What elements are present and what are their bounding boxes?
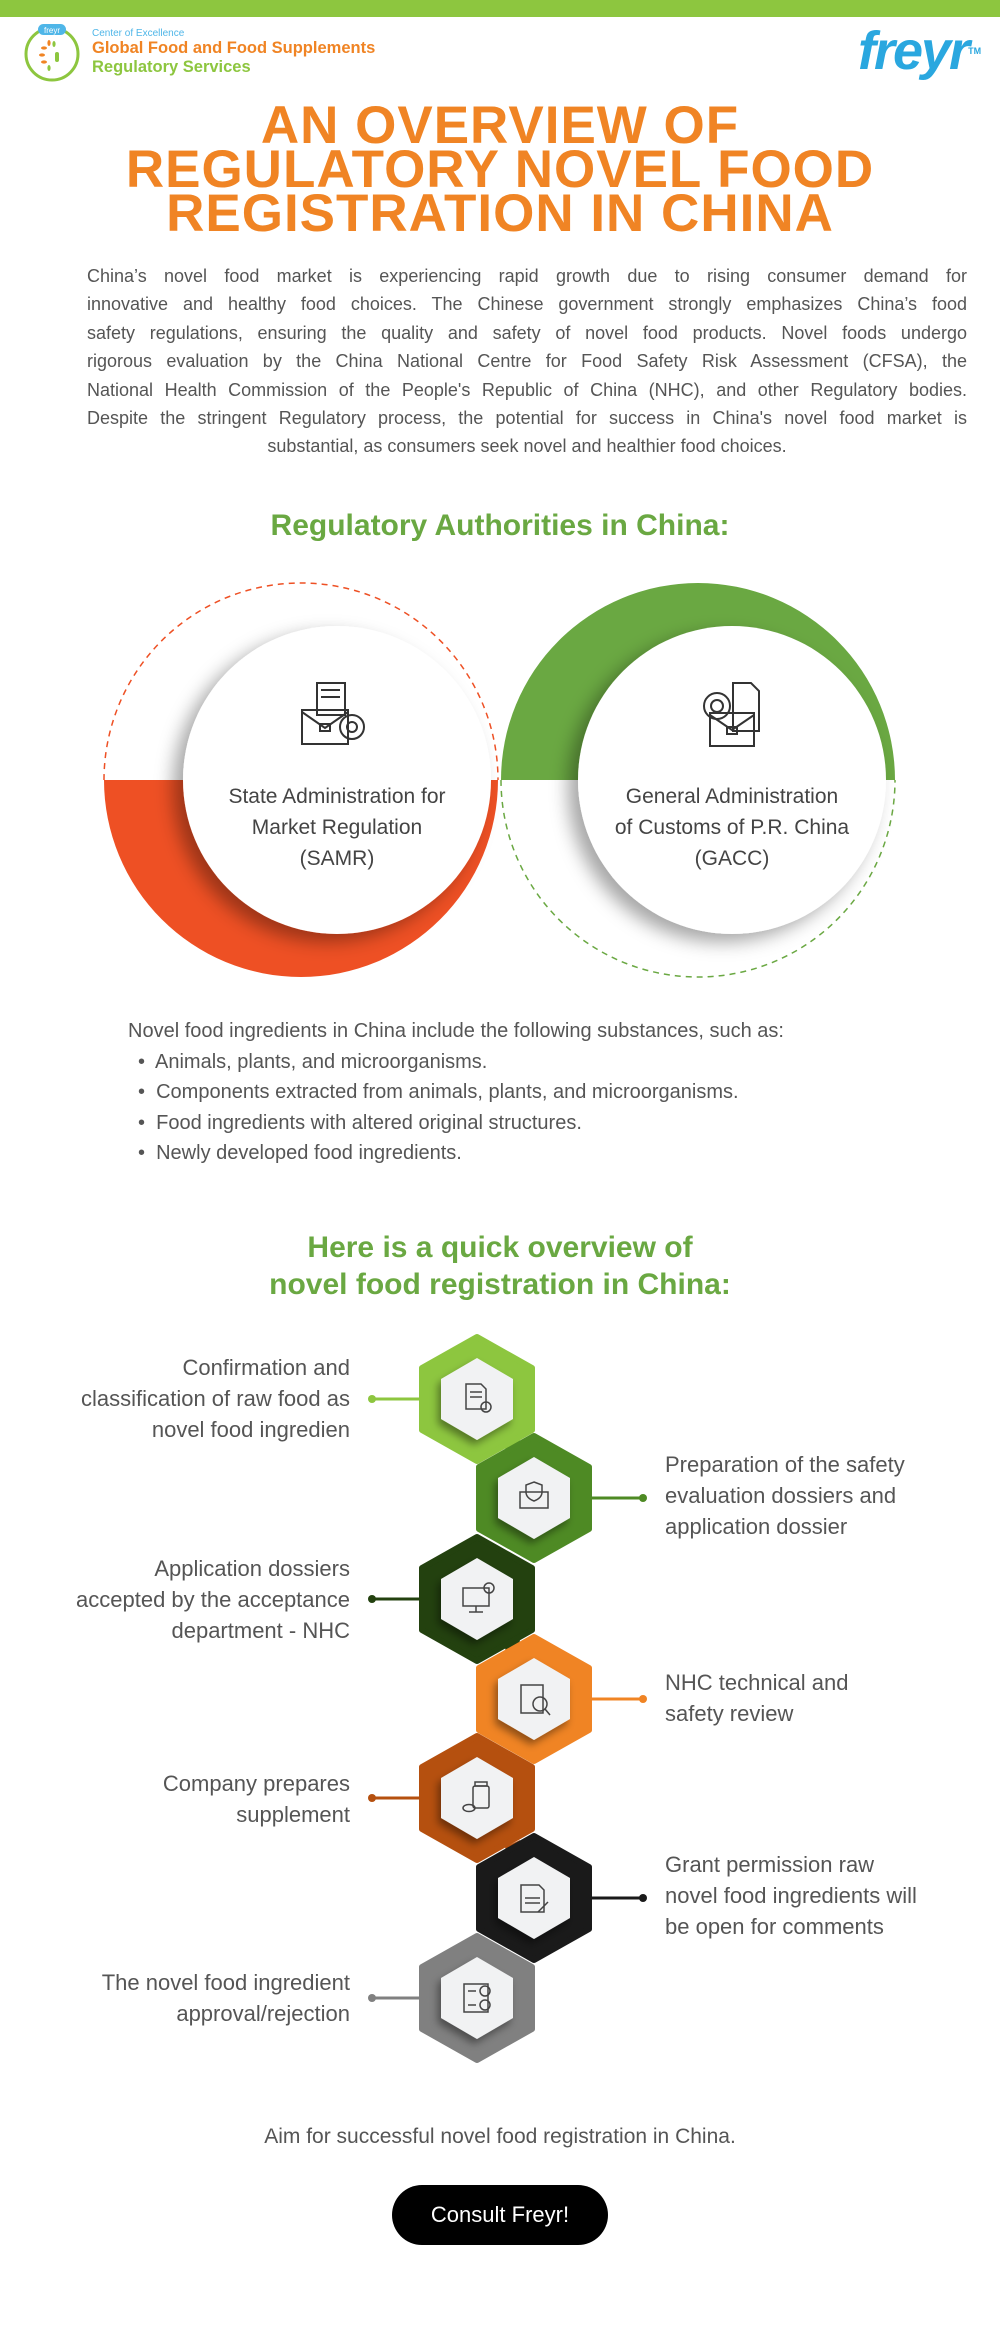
novel food ingredients list: • Components extracted from animals, plants, and microorganisms. <box>138 1081 739 1103</box>
step 1 text: Confirmation and <box>182 1355 350 1380</box>
step 3 <box>368 1537 532 1672</box>
logo: center of excellence: Global Food and Food Supplements <box>92 39 375 57</box>
panel: SAMR: State Administration for <box>228 785 446 808</box>
step 1 text: classification of raw food as <box>81 1386 350 1411</box>
step 6 text: novel food ingredients will <box>665 1883 917 1908</box>
logo: center of excellence: Center of Excellence <box>92 28 184 39</box>
step 2 text <box>665 1452 905 1539</box>
step 2 <box>479 1436 647 1572</box>
step 5 text: Company prepares <box>163 1771 350 1796</box>
logo: center of excellence <box>24 24 375 82</box>
button: consult freyr: Consult Freyr! <box>431 2202 569 2227</box>
step 4 text <box>665 1670 848 1726</box>
intro paragraph: substantial, as consumers seek novel and healthier food choices. <box>267 436 787 456</box>
step 7 text: The novel food ingredient <box>102 1970 350 1995</box>
step 2 text: application dossier <box>665 1514 847 1539</box>
intro paragraph: National Health Commission of the People's Republic of China (NHC), and other Regulatory bodies. <box>87 380 967 400</box>
closing text: Aim for successful novel food registration in China. <box>264 2125 736 2148</box>
novel food ingredients list: Novel food ingredients in China include the following substances, such as: <box>128 1020 784 1042</box>
intro paragraph: safety regulations, ensuring the quality and safety of novel food products. Novel foods undergo <box>87 323 967 343</box>
novel food ingredients list: • Newly developed food ingredients. <box>138 1142 462 1164</box>
heading: quick overview: novel food registration in China: <box>269 1268 731 1301</box>
step 4 text: NHC technical and <box>665 1670 848 1695</box>
intro paragraph: innovative and healthy food choices. The Chinese government strongly emphasizes China’s food <box>87 294 967 314</box>
step 3 text: department - NHC <box>171 1618 350 1643</box>
step 1 text: novel food ingredien <box>152 1417 350 1442</box>
heading: quick overview: Here is a quick overview of <box>307 1231 693 1264</box>
step 6 text <box>665 1852 917 1939</box>
step 6 text: Grant permission raw <box>665 1852 874 1877</box>
intro paragraph: China’s novel food market is experiencing rapid growth due to rising consumer demand for <box>87 266 967 286</box>
step 5 <box>368 1736 532 1872</box>
button: consult freyr <box>392 2185 608 2245</box>
intro paragraph: Despite the stringent Regulatory process, the potential for success in China's novel food market is <box>87 408 967 428</box>
logo: freyr: freyrTM <box>858 21 981 81</box>
step 5 text: supplement <box>236 1802 350 1827</box>
process hexagon chain <box>368 1334 647 2063</box>
intro paragraph <box>87 266 967 456</box>
panel: GACC <box>501 583 895 977</box>
heading: quick overview <box>269 1231 731 1301</box>
step 5 text <box>163 1771 350 1827</box>
panel: GACC: General Administration <box>626 785 838 808</box>
authorities diagram <box>103 582 896 978</box>
title: AN OVERVIEW OF <box>261 96 739 155</box>
logo: center of excellence: Regulatory Services <box>92 58 251 76</box>
panel: GACC: (GACC) <box>695 847 769 870</box>
step 4 text: safety review <box>665 1701 793 1726</box>
panel: GACC: of Customs of P.R. China <box>615 816 849 839</box>
step 7 text <box>102 1970 350 2026</box>
novel food ingredients list <box>128 1020 784 1164</box>
novel food ingredients list: • Food ingredients with altered original structures. <box>138 1112 582 1134</box>
panel: SAMR: (SAMR) <box>300 847 374 870</box>
novel food ingredients list: • Animals, plants, and microorganisms. <box>138 1050 487 1072</box>
step 1 <box>368 1337 532 1470</box>
step 2 text: evaluation dossiers and <box>665 1483 896 1508</box>
panel: SAMR: Market Regulation <box>252 816 422 839</box>
step 7 text: approval/rejection <box>176 2001 350 2026</box>
step 6 <box>479 1836 647 1972</box>
title: REGULATORY NOVEL FOOD <box>126 140 874 199</box>
panel: SAMR <box>104 583 498 977</box>
heading: regulatory authorities: Regulatory Authorities in China: <box>271 509 729 542</box>
step 4 <box>479 1637 647 1772</box>
step 3 text <box>76 1556 350 1643</box>
logo: center of excellence: freyr <box>44 26 60 35</box>
step 1 text <box>81 1355 350 1442</box>
step 2 text: Preparation of the safety <box>665 1452 905 1477</box>
title <box>126 96 874 243</box>
step 6 text: be open for comments <box>665 1914 884 1939</box>
top green bar <box>0 0 1000 17</box>
intro paragraph: rigorous evaluation by the China National Centre for Food Safety Risk Assessment (CFSA), the <box>87 351 967 371</box>
title: REGISTRATION IN CHINA <box>166 184 834 243</box>
step 3 text: accepted by the acceptance <box>76 1587 350 1612</box>
step 7 <box>368 1936 532 2060</box>
step 3 text: Application dossiers <box>154 1556 350 1581</box>
